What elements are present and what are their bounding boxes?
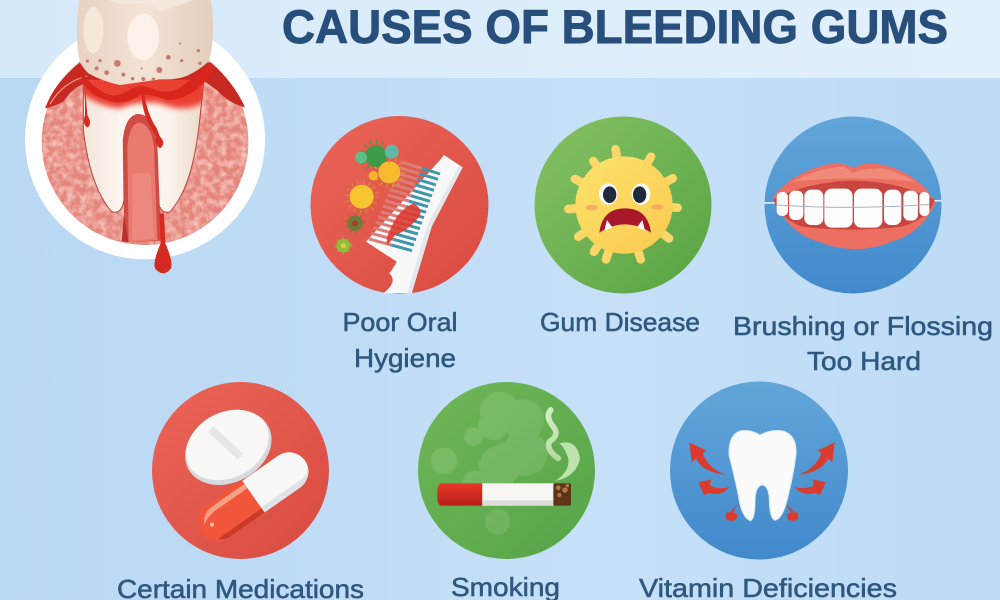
tooth crown — [77, 0, 213, 85]
circle badge — [418, 382, 595, 559]
icon: cigarette and smoke — [431, 392, 580, 534]
blood on bristles — [387, 203, 420, 245]
icon: lips and teeth — [764, 164, 942, 249]
icon: toothbrush and germs — [335, 142, 463, 293]
illustration: bleeding tooth — [25, 0, 265, 273]
circle badge — [764, 116, 942, 294]
root canal — [123, 114, 161, 242]
label: gum disease: Gum Disease — [540, 307, 700, 337]
label: brushing or flossing too hard: Too Hard — [807, 346, 921, 376]
panel: poor oral hygiene — [310, 116, 488, 294]
circle badge — [152, 382, 329, 559]
title: CAUSES OF BLEEDING GUMS — [282, 0, 948, 53]
panel: brushing or flossing too hard — [764, 116, 942, 294]
label: brushing or flossing too hard: Brushing or Flossing — [733, 311, 993, 341]
icon: tooth and arrows — [689, 430, 835, 521]
panel: certain medications — [152, 382, 329, 559]
gum tissue — [42, 38, 248, 245]
circle badge — [670, 382, 848, 560]
blood drips — [84, 85, 90, 128]
right arrows — [787, 442, 835, 521]
tooth root — [83, 80, 204, 212]
blood fading into root — [84, 80, 204, 113]
panel: vitamin deficiencies — [670, 382, 848, 560]
circle badge — [534, 116, 712, 294]
icon: pills — [172, 396, 316, 549]
panel: gum disease — [534, 116, 712, 294]
panel: smoking — [418, 382, 595, 559]
label: poor oral hygiene: Hygiene — [354, 343, 456, 373]
header band — [0, 0, 1000, 78]
falling blood drop — [154, 213, 172, 273]
label: poor oral hygiene: Poor Oral — [342, 307, 458, 337]
icon: germ face — [568, 149, 678, 259]
left arrows — [689, 442, 737, 521]
bleeding gum sides — [45, 63, 245, 108]
circle badge — [310, 116, 488, 294]
germs — [335, 142, 403, 254]
white ring — [25, 19, 265, 259]
gum line wave — [82, 63, 213, 102]
plaque dots — [86, 42, 202, 81]
